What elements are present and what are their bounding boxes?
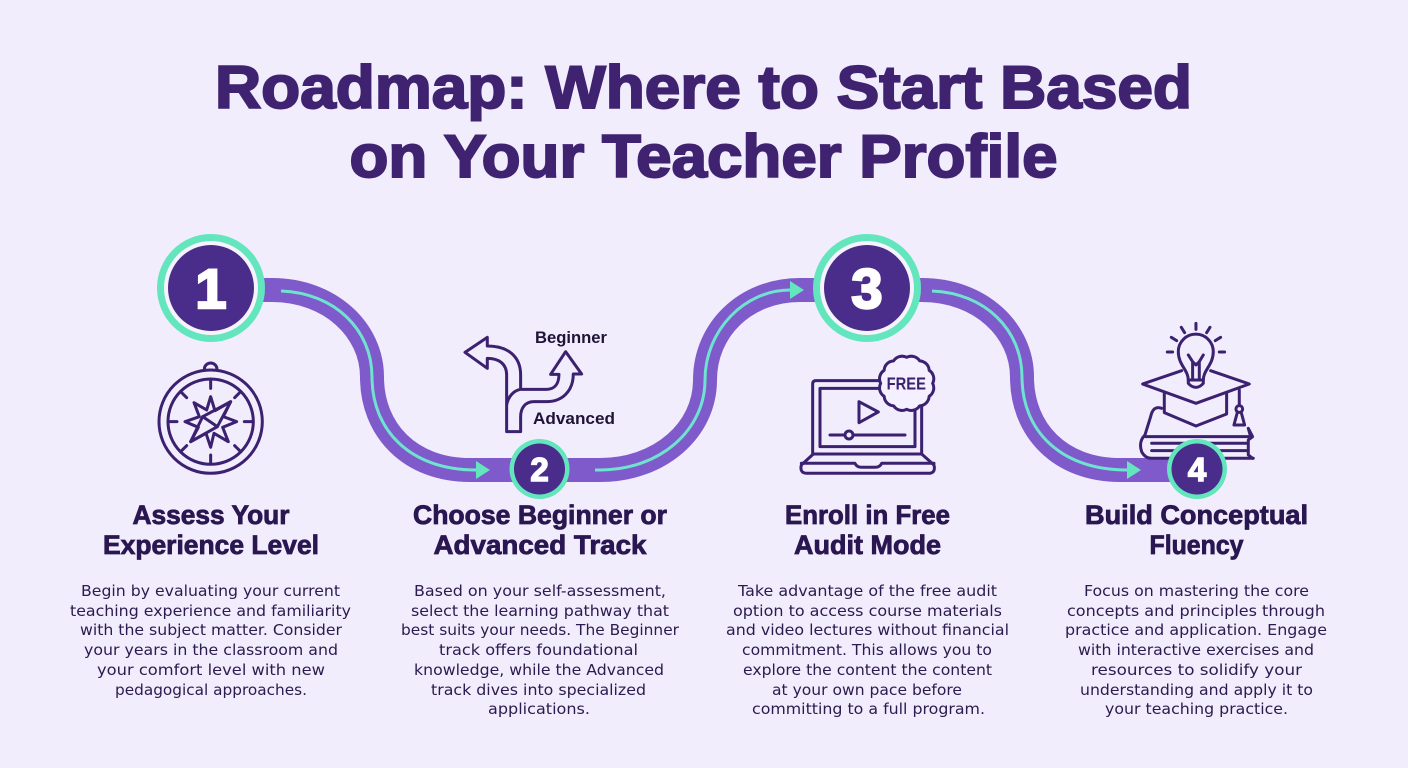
title: [215, 54, 1192, 190]
step 3 heading: Audit Mode: [794, 530, 941, 560]
step 4 description: resources to solidify your: [1091, 661, 1303, 679]
roadmap path: step 2 to step 3: [560, 281, 830, 470]
step 1 number badge: 1: [195, 257, 227, 320]
step 2 description: track offers foundational: [439, 641, 638, 659]
step 2 description: select the learning pathway that: [411, 602, 669, 620]
step 4 number badge: 4: [1188, 451, 1207, 488]
step 1 description: with the subject matter. Consider: [80, 621, 343, 639]
step 4 heading: [1085, 500, 1308, 560]
icon: graduation cap on book with light bulb: [1141, 323, 1253, 458]
step 1 heading: Experience Level: [103, 530, 319, 560]
icon: laptop with video and free badge: [801, 356, 934, 473]
label: Advanced: Advanced: [533, 410, 615, 428]
step 3 description: committing to a full program.: [752, 700, 985, 718]
step 1 description: pedagogical approaches.: [115, 681, 307, 699]
step 2 heading: Choose Beginner or: [413, 500, 667, 530]
step 4 description: your teaching practice.: [1105, 700, 1288, 718]
step 3 description: and video lectures without financial: [726, 621, 1009, 639]
step 4 number badge: [1167, 439, 1227, 499]
step 4 heading: Fluency: [1150, 530, 1244, 560]
step 3 heading: [785, 500, 950, 560]
step 2 heading: [413, 500, 667, 560]
step 1 number badge: [157, 234, 265, 342]
step 4 description: with interactive exercises and: [1078, 641, 1314, 659]
badge: free: FREE: [887, 374, 926, 394]
icon: forked track arrows: [465, 329, 615, 432]
step 4 description: [1065, 582, 1327, 718]
step 2 description: Based on your self-assessment,: [414, 582, 666, 600]
step 4 description: concepts and principles through: [1067, 602, 1325, 620]
step 1 description: teaching experience and familiarity: [70, 602, 351, 620]
step 1 heading: Assess Your: [132, 500, 290, 530]
step 2 description: [401, 582, 680, 718]
step 3 heading: Enroll in Free: [785, 500, 950, 530]
step 1 heading: [103, 500, 319, 560]
step 2 number badge: [510, 439, 570, 499]
step 2 description: best suits your needs. The Beginner: [401, 621, 680, 639]
step 3 number badge: 3: [851, 257, 883, 320]
title: on Your Teacher Profile: [350, 123, 1058, 190]
step 3 description: at your own pace before: [772, 681, 962, 699]
step 3 description: [726, 582, 1009, 718]
step 1 description: [70, 582, 351, 699]
step 1 description: your years in the classroom and: [84, 641, 338, 659]
step 2 description: track dives into specialized: [431, 681, 646, 699]
step 3 description: Take advantage of the free audit: [737, 582, 997, 600]
roadmap path: step 3 to step 4: [908, 290, 1180, 479]
step 3 number badge: [813, 234, 921, 342]
step 3 description: option to access course materials: [733, 602, 1002, 620]
label: Beginner: Beginner: [535, 329, 608, 347]
icon: compass: [159, 363, 262, 473]
step 2 heading: Advanced Track: [434, 530, 648, 560]
roadmap path: step 1 to step 2: [258, 290, 520, 479]
step 2 description: knowledge, while the Advanced: [414, 661, 664, 679]
step 2 description: applications.: [488, 700, 590, 718]
step 4 description: practice and application. Engage: [1065, 621, 1327, 639]
step 1 description: Begin by evaluating your current: [81, 582, 340, 600]
step 4 description: Focus on mastering the core: [1084, 582, 1309, 600]
title: Roadmap: Where to Start Based: [215, 54, 1192, 121]
step 1 description: your comfort level with new: [97, 661, 325, 679]
step 4 heading: Build Conceptual: [1085, 500, 1308, 530]
step 2 number badge: 2: [530, 451, 549, 488]
step 4 description: understanding and apply it to: [1080, 681, 1313, 699]
step 3 description: commitment. This allows you to: [742, 641, 992, 659]
step 3 description: explore the content the content: [743, 661, 992, 679]
